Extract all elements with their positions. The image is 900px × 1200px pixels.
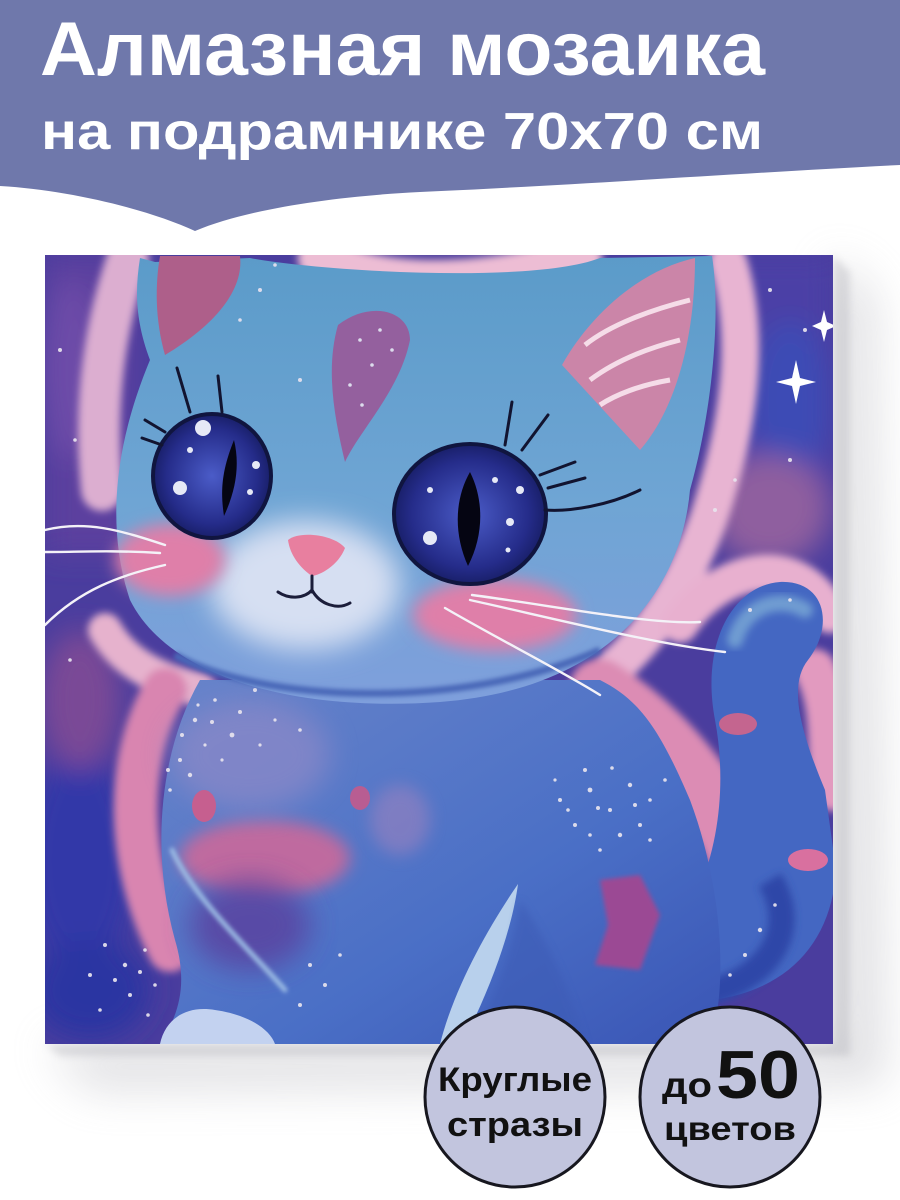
canvas drop shadow [45, 255, 885, 1090]
badge: up to 50 colours: цветов [664, 1110, 796, 1147]
chin shadow [175, 650, 600, 693]
header banner [0, 0, 900, 231]
right cheek blush [413, 579, 577, 651]
pink halo around kitten [99, 258, 834, 950]
badge: round rhinestones: Круглые [438, 1061, 592, 1099]
star sparkles [776, 310, 836, 404]
muzzle [210, 520, 400, 650]
badge: up to 50 colours: до [662, 1066, 712, 1105]
tail [708, 582, 833, 1006]
whiskers [45, 526, 725, 695]
left cheek blush [115, 524, 225, 596]
badge: round rhinestones [425, 1007, 605, 1187]
badge: up to 50 colours: 50 [716, 1037, 800, 1113]
forehead mark [332, 311, 410, 462]
eyes [142, 368, 640, 584]
kitten body [160, 680, 720, 1044]
badge: round rhinestones: стразы [447, 1106, 583, 1144]
title: Алмазная мозаика [40, 7, 766, 92]
glitter [58, 288, 807, 1017]
nose and mouth [278, 535, 350, 606]
subtitle: на подрамнике 70х70 см [41, 103, 763, 161]
left ear [157, 256, 240, 355]
diamond mosaic artwork: kitten painting [25, 255, 836, 1044]
head with ears [115, 256, 716, 704]
painting background [25, 255, 833, 1044]
badge: up to 50 colours [640, 1007, 820, 1187]
right ear [562, 258, 695, 450]
